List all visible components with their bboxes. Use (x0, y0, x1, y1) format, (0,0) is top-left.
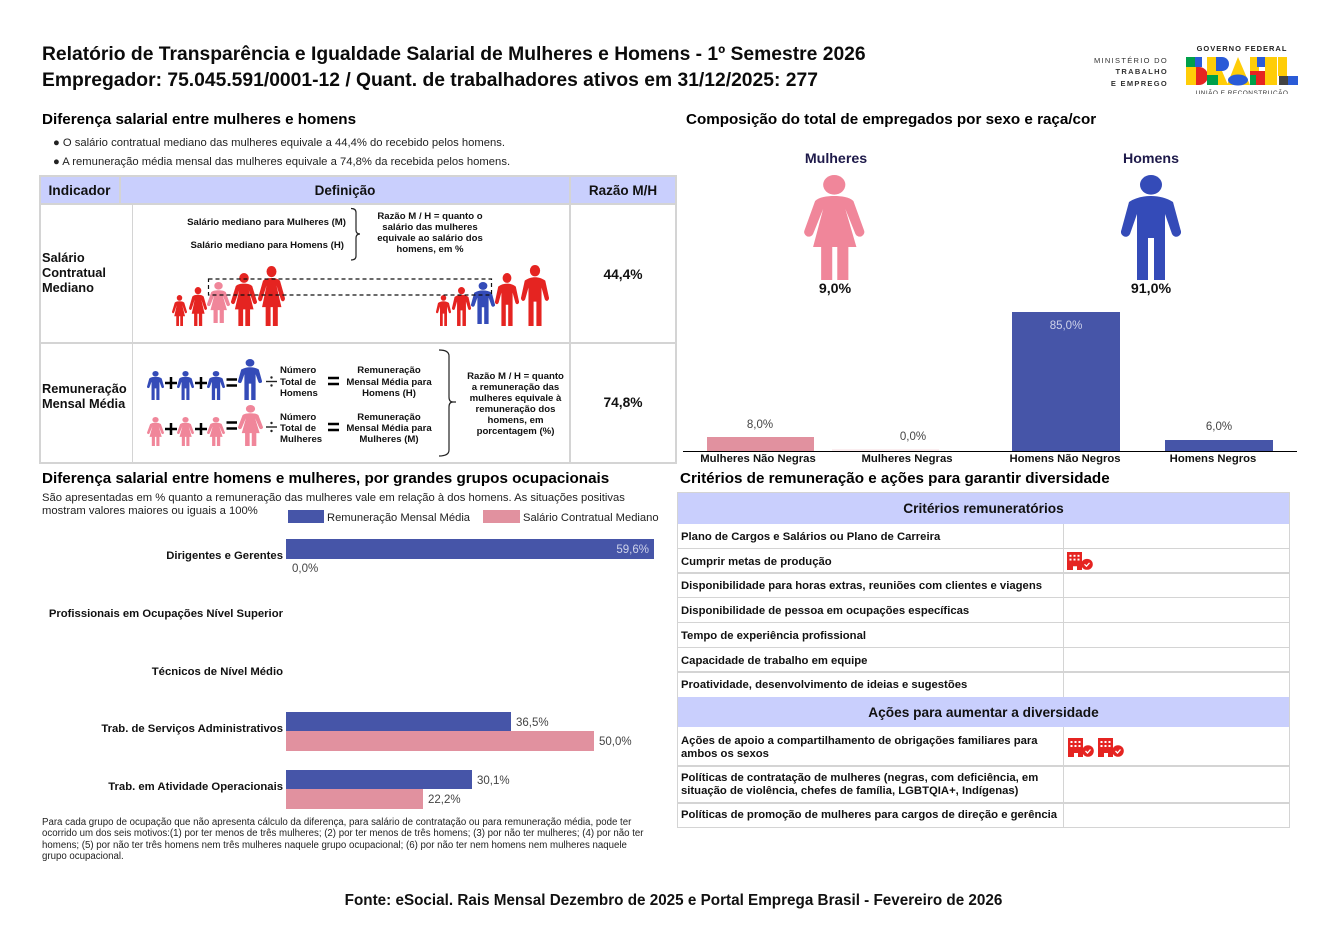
text: razão remuneração: mulheres equivale à (470, 393, 561, 404)
legend swatch: Salário Contratual Mediano (483, 510, 520, 523)
value: 85,0%: 85,0% (1050, 320, 1082, 332)
label: Profissionais: Profissionais em Ocupações Nível Superior (49, 608, 283, 620)
value: 50,0%: 50,0% (599, 736, 632, 748)
text: número total de mulheres: Mulheres (280, 434, 322, 445)
text: número total de mulheres: Total de (280, 423, 316, 434)
row: Plano de Cargos e Salários ou Plano de Carreira (681, 531, 940, 543)
text: número total de mulheres: Número (280, 412, 316, 423)
text: razão salário (377, 211, 483, 255)
logo: Ministério do Trabalho e Emprego: MINISTÉRIO DO (1094, 56, 1168, 65)
legend swatch: Remuneração Mensal Média (288, 510, 324, 523)
logo: Ministério do Trabalho e Emprego (1094, 56, 1168, 88)
footnote: grupo ocupacional. (42, 851, 124, 862)
legend label: Remuneração Mensal Média: Remuneração Mensal Média (327, 512, 470, 524)
label: Trab. de Serviços Administrativos: Trab. de Serviços Administrativos (101, 723, 283, 735)
text: número total de homens (280, 365, 318, 399)
text: razão remuneração: porcentagem (%) (477, 426, 554, 437)
text block: resumo: ● A remuneração média mensal das mulheres equivale a 74,8% da recebida pelos homens. (53, 156, 510, 168)
title: Relatório de Transparência e Igualdade Salarial de Mulheres e Homens - 1º Semestre 2026 (42, 44, 866, 65)
text: remuneração mulheres: Mulheres (M) (359, 434, 419, 445)
bar: Administrativos rosa (286, 731, 594, 751)
row label: Salário Contratual Mediano: Contratual (42, 265, 106, 280)
label: Dirigentes e Gerentes: Dirigentes e Gerentes (166, 550, 283, 562)
bar: Homens Negros (1165, 440, 1273, 451)
text: remuneração mulheres (346, 412, 432, 445)
text: número total de homens: Homens (280, 388, 318, 399)
value: 8,0%: 8,0% (747, 419, 773, 431)
row: Capacidade de trabalho em equipe (681, 655, 867, 667)
axis label: Mulheres Negras: Mulheres Negras (861, 453, 953, 465)
footnote: ocorrido um dos seis motivos:(1) por ter menos de três mulheres; (2) por ter menos de três homens; (3) por não ter mulheres; (4) por não ter (42, 828, 644, 839)
text: remuneração homens: Mensal Média para (346, 376, 432, 388)
column chart: sexo e raça/cor (683, 312, 1297, 465)
row (681, 735, 1038, 760)
label: Técnicos: Técnicos de Nível Médio (152, 666, 283, 678)
title (42, 44, 866, 91)
text: remuneração homens: Remuneração (357, 365, 421, 376)
heading: diferença salarial: Diferença salarial entre mulheres e homens (42, 111, 356, 128)
row: Políticas de promoção de mulheres para cargos de direção e gerência (681, 809, 1057, 821)
text: salário mediano homens: Salário mediano para Homens (H) (190, 240, 344, 251)
column header: Indicador: Indicador (48, 183, 111, 198)
value: 59,6%: 59,6% (616, 544, 649, 556)
bar chart: grupos ocupacionais (49, 539, 654, 809)
footnote (42, 817, 644, 862)
row label: Remuneração Mensal Média: Remuneração (42, 381, 127, 396)
value: 9,0%: 9,0% (819, 281, 851, 297)
label: Trab. em Atividade Operacionais: Trab. em Atividade Operacionais (108, 781, 283, 793)
row: Tempo de experiência profissional (681, 630, 866, 642)
text: razão salário: Razão M / H = quanto o (377, 211, 483, 222)
row (681, 772, 1038, 797)
text: razão remuneração (467, 371, 564, 437)
table header: Ações: Ações para aumentar a diversidade (868, 705, 1099, 720)
text: remuneração homens: Homens (H) (362, 388, 416, 399)
text: razão remuneração: Razão M / H = quanto (467, 371, 564, 382)
text: número total de homens: Total de (280, 376, 316, 388)
row: Ações de apoio a compartilhamento de obrigações familiares para (681, 735, 1038, 747)
bar: Dirigentes azul (286, 539, 654, 559)
row: Cumprir metas de produção (681, 556, 832, 568)
axis label: Homens Não Negros: Homens Não Negros (1009, 453, 1121, 465)
row: ambos os sexos (681, 748, 769, 760)
row: situação de violência, chefes de família, LGBTQIA+, Indígenas) (681, 785, 1018, 797)
label: Mulheres: Mulheres (805, 151, 867, 167)
text: razão salário: homens, em % (396, 244, 464, 255)
value: 30,1%: 30,1% (477, 775, 510, 787)
value: 6,0%: 6,0% (1206, 421, 1232, 433)
panel: critérios remuneratórios (677, 492, 1290, 828)
bar: Homens Não Negros (1012, 312, 1120, 451)
value: 36,5%: 36,5% (516, 717, 549, 729)
logo: Ministério do Trabalho e Emprego: E EMPREGO (1111, 79, 1168, 88)
footnote: homens; (5) por não ter três homens nem três mulheres naquele grupo ocupacional; (6) por não ter nem homens nem mulheres naquele (42, 840, 627, 851)
axis label: Mulheres Não Negras: Mulheres Não Negras (700, 453, 816, 465)
text block: explicação (42, 492, 625, 517)
value: 0,0%: 0,0% (292, 563, 318, 575)
text: razão remuneração: a remuneração das (472, 382, 559, 393)
row label: Salário Contratual Mediano (42, 250, 106, 295)
text: razão salário: salário das mulheres (382, 222, 478, 233)
value: 22,2%: 22,2% (428, 794, 461, 806)
legend label: Salário Contratual Mediano: Salário Contratual Mediano (523, 512, 659, 524)
heading: composição: Composição do total de empregados por sexo e raça/cor (686, 111, 1096, 128)
logo: Ministério do Trabalho e Emprego: TRABALHO (1116, 67, 1168, 76)
text: número total de mulheres (280, 412, 322, 445)
value: 74,8%: 74,8% (603, 395, 643, 410)
column header: Definição: Definição (315, 183, 375, 198)
text block: resumo (53, 137, 510, 168)
text: razão remuneração: remuneração dos (476, 404, 555, 415)
value: 91,0%: 91,0% (1131, 281, 1171, 297)
value: 44,4%: 44,4% (603, 267, 643, 282)
bar: Mulheres Negras (832, 449, 939, 451)
row label: Remuneração Mensal Média (42, 381, 127, 411)
row: Proatividade, desenvolvimento de ideias e sugestões (681, 679, 967, 691)
bar: Operacionais rosa (286, 789, 423, 809)
row: Disponibilidade de pessoa em ocupações específicas (681, 605, 969, 617)
text block: explicação: São apresentadas em % quanto a remuneração das mulheres vale em relação à dos homens. As situações positivas (42, 492, 625, 504)
column header: Razão M/H: Razão M/H (589, 183, 657, 198)
text: razão salário: equivale ao salário dos (377, 233, 483, 244)
panel: tabela de indicadores (39, 175, 677, 464)
logo: Governo Federal Brasil (1186, 44, 1298, 94)
text: remuneração mulheres: Remuneração (357, 412, 421, 423)
text: razão remuneração: homens, em (488, 415, 543, 426)
row label: Salário Contratual Mediano: Salário (42, 250, 85, 265)
table header: Critérios remuneratórios: Critérios remuneratórios (903, 501, 1064, 516)
source: Fonte: eSocial. Rais Mensal Dezembro de 2025 e Portal Emprega Brasil - Fevereiro de 2026 (345, 892, 1002, 909)
heading: critérios: Critérios de remuneração e ações para garantir diversidade (680, 470, 1110, 487)
bar: Operacionais azul (286, 770, 472, 789)
bar: Administrativos azul (286, 712, 511, 731)
legend (288, 510, 659, 524)
text block: explicação: mostram valores maiores ou iguais a 100% (42, 505, 258, 517)
row label: Salário Contratual Mediano: Mediano (42, 280, 94, 295)
row label: Remuneração Mensal Média: Mensal Média (42, 396, 125, 411)
title: Empregador: 75.045.591/0001-12 / Quant. de trabalhadores ativos em 31/12/2025: 277 (42, 70, 818, 91)
text: remuneração homens (346, 365, 432, 399)
heading: grupos ocupacionais: Diferença salarial entre homens e mulheres, por grandes grupos ocupacionais (42, 470, 609, 487)
row: Disponibilidade para horas extras, reuniões com clientes e viagens (681, 580, 1042, 592)
text: número total de homens: Número (280, 365, 316, 376)
text: remuneração mulheres: Mensal Média para (346, 423, 432, 434)
value: 0,0%: 0,0% (900, 431, 926, 443)
logo: Governo Federal Brasil: GOVERNO FEDERAL (1197, 44, 1287, 53)
text: salário mediano mulheres: Salário mediano para Mulheres (M) (187, 217, 346, 228)
axis label: Homens Negros: Homens Negros (1170, 453, 1256, 465)
label: Homens: Homens (1123, 151, 1179, 167)
footnote: Para cada grupo de ocupação que não apresenta cálculo da diferença, para salário de contratação ou para remuneração média, pode ter (42, 817, 631, 828)
text block: resumo: ● O salário contratual mediano das mulheres equivale a 44,4% do recebido pelos homens. (53, 137, 505, 149)
bar: Mulheres Não Negras (707, 437, 814, 451)
row: Políticas de contratação de mulheres (negras, com deficiência, em (681, 772, 1038, 784)
